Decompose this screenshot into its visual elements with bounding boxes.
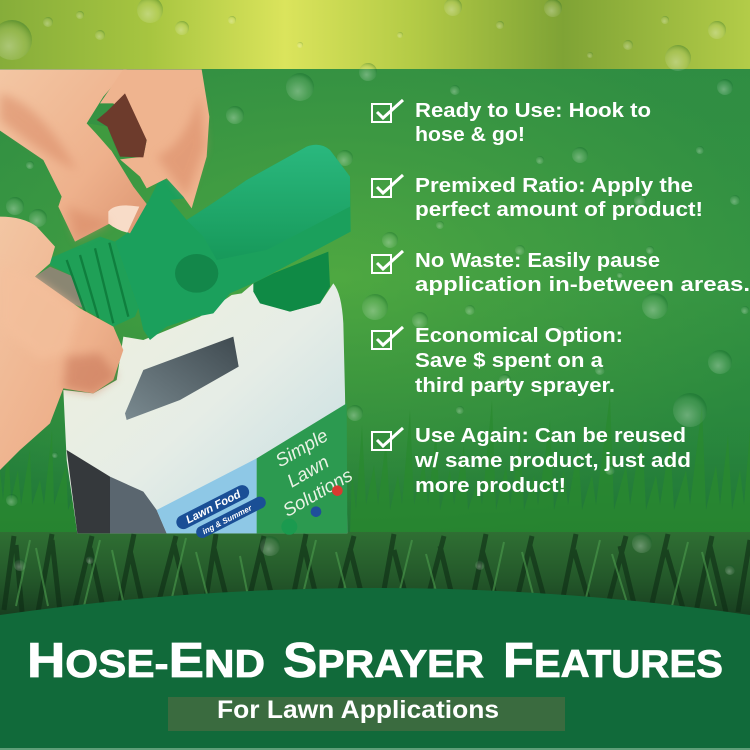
sprayer cap xyxy=(253,252,330,312)
feature 2: premixed ratio: Premixed Ratio: Apply the xyxy=(415,175,693,197)
feature 4: economical option: Economical Option: xyxy=(415,325,623,347)
feature 5: use again: Use Again: Can be reused xyxy=(415,425,686,447)
bottle xyxy=(63,283,356,546)
icon: checkbox xyxy=(372,327,403,349)
upper hand xyxy=(0,69,209,242)
bottle label: product name xyxy=(256,424,356,521)
feature 1: ready to use: hose & go! xyxy=(415,124,525,146)
feature 1: ready to use xyxy=(372,100,651,146)
top banner with water drops xyxy=(0,0,750,70)
feature 3: no waste: application in-between areas. xyxy=(415,274,750,296)
bottle label: lawn food tags: Lawn Food xyxy=(184,488,244,526)
feature 3: no waste: No Waste: Easily pause xyxy=(415,250,660,272)
feature 5: use again: more product! xyxy=(415,475,566,497)
water drops on green background xyxy=(6,45,749,506)
icon: checkbox xyxy=(372,100,403,122)
photo: hands holding sprayer on bottle xyxy=(0,69,356,546)
feature 2: premixed ratio: perfect amount of product! xyxy=(415,199,703,221)
feature 5: use again: w/ same product, just add xyxy=(414,450,691,472)
feature 2: premixed ratio xyxy=(372,175,703,221)
subtitle bar: For Lawn Applications xyxy=(217,696,499,724)
sprayer head xyxy=(50,145,351,340)
bottom title panel xyxy=(0,588,750,750)
subtitle bar xyxy=(168,696,565,731)
grass behind the sprayer xyxy=(0,395,750,533)
feature 4: economical option: third party sprayer. xyxy=(415,375,615,397)
metal hose fitting xyxy=(35,267,85,308)
feature list xyxy=(372,100,750,497)
lower hand xyxy=(0,217,123,470)
feature 4: economical option: Save $ spent on a xyxy=(415,350,604,372)
title: SPRAYER xyxy=(283,634,484,688)
bottle label: product name: Lawn xyxy=(283,451,332,491)
feature 3: no waste xyxy=(372,250,750,296)
bottle label: product name: Simple xyxy=(272,424,331,471)
title: FEATURES xyxy=(503,634,723,688)
feature 4: economical option xyxy=(372,325,623,397)
title: HOSE-END xyxy=(27,634,265,688)
bottle label: product name: Solutions xyxy=(279,464,356,521)
feature 1: ready to use: Ready to Use: Hook to xyxy=(415,100,651,122)
feature 5: use again xyxy=(372,425,691,497)
title xyxy=(27,634,723,688)
bottle label: lawn food tags xyxy=(174,478,268,546)
icon: checkbox xyxy=(372,251,403,273)
bottle label: lawn food tags: ing & Summer xyxy=(201,503,254,536)
icon: checkbox xyxy=(372,428,403,450)
main green background xyxy=(0,69,750,533)
dark grass strip xyxy=(0,532,750,622)
icon: checkbox xyxy=(372,175,403,197)
